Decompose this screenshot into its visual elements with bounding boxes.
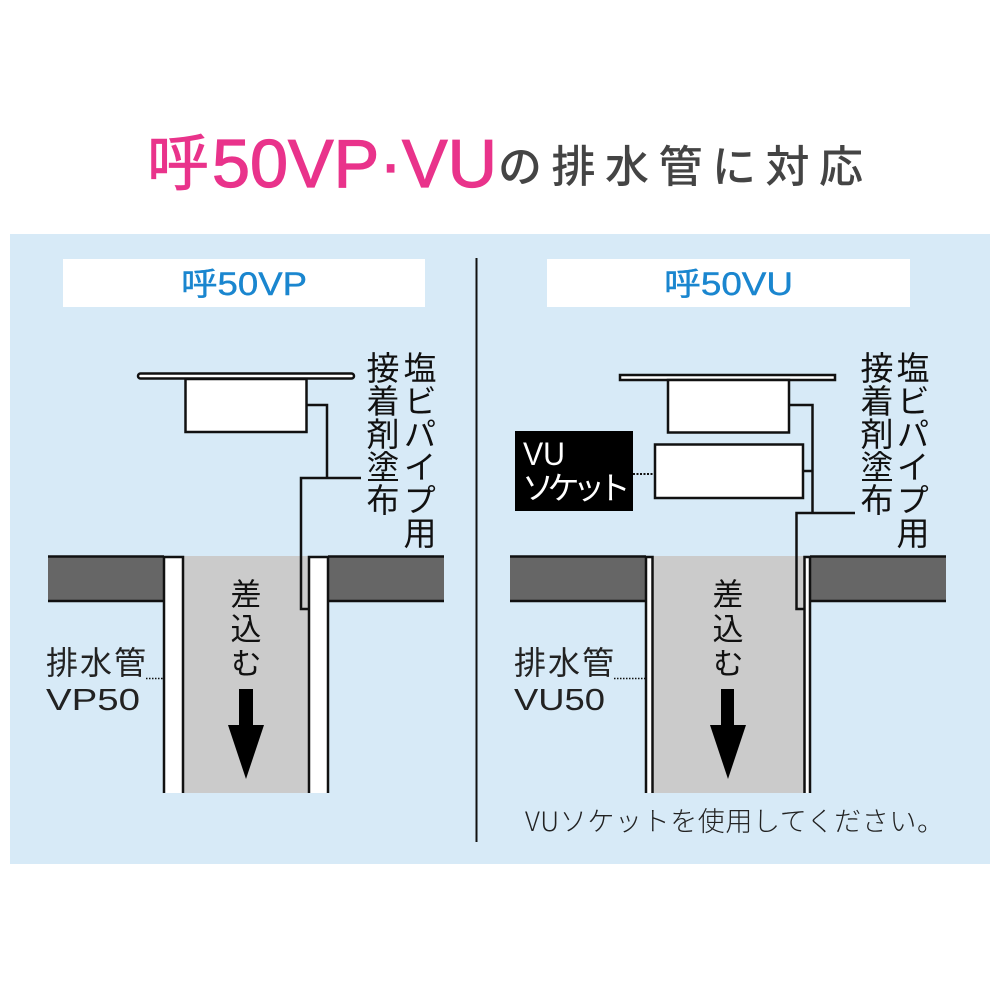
vertical label: adhesive: 塩ビパイプ用 [889, 351, 937, 549]
note: VUソケットを使用してください。 [525, 800, 945, 839]
panel: background [10, 234, 990, 864]
vertical label: adhesive: 塩ビパイプ用 [396, 351, 444, 549]
vertical label: insert: 差込む [224, 578, 268, 682]
label: pipe VU50: VU50 [514, 682, 605, 717]
vertical label: adhesive: 接着剤塗布 [359, 351, 407, 516]
arrow: down [710, 689, 746, 779]
heading: VP: 呼50VP [181, 266, 307, 302]
adhesive leader lines [789, 405, 855, 609]
label: VU socket [515, 431, 655, 511]
vertical label: adhesive: 接着剤塗布 [853, 351, 901, 516]
label: pipe VP50: VP50 [46, 682, 140, 717]
arrow: down [228, 689, 264, 779]
divider [476, 258, 478, 842]
label: VU socket: VU [523, 436, 565, 472]
heading: VU: 呼50VU [664, 266, 793, 302]
floor walls [510, 556, 946, 601]
label: pipe VP50: 排水管 [46, 638, 148, 684]
VU socket [655, 444, 803, 498]
heading: VP [63, 259, 425, 307]
label: pipe VU50: 排水管 [514, 638, 616, 684]
title: の排水管に対応 [498, 131, 872, 195]
vertical label: adhesive [853, 351, 937, 549]
heading: VU [547, 259, 910, 307]
title: 呼 [147, 113, 209, 203]
panel: VU50 diagram [510, 259, 946, 839]
adhesive leader lines [301, 405, 361, 609]
title [147, 113, 872, 203]
panel: VP50 diagram [46, 259, 444, 793]
inserted pipe fill [652, 556, 805, 793]
floor walls [48, 556, 444, 601]
title: 50VP·VU [212, 126, 497, 202]
flange and socket cup [620, 375, 835, 432]
vertical label: adhesive [359, 351, 444, 549]
label: pipe VP50 [46, 638, 164, 717]
drain pipe walls [646, 556, 810, 793]
flange and socket cup [138, 374, 354, 432]
vertical label: insert: 差込む [706, 578, 750, 682]
inserted pipe fill [183, 556, 309, 793]
drain pipe walls [164, 556, 328, 793]
label: pipe VU50 [514, 638, 646, 717]
label: VU socket: ソケット [522, 463, 627, 509]
